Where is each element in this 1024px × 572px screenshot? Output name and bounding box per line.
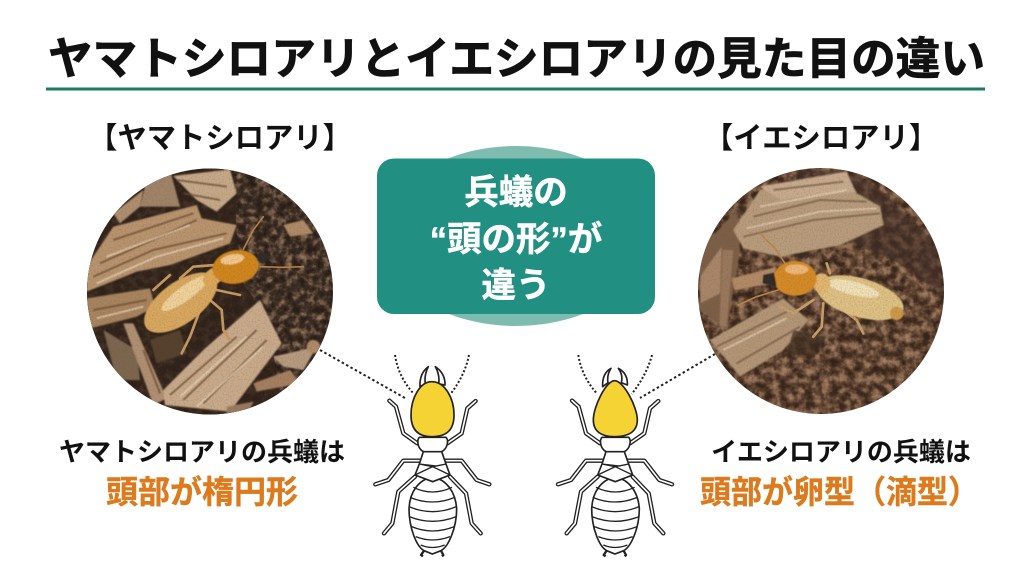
left caption: 頭部が楕円形 [106, 474, 298, 510]
left soldier illustration: elliptical head [375, 355, 489, 556]
right caption [700, 437, 979, 510]
right caption: 頭部が卵型（滴型） [700, 474, 979, 510]
right caption: イエシロアリの兵蟻は [711, 437, 971, 467]
left caption [59, 437, 345, 510]
photo: yamato termite on wood [87, 168, 333, 414]
right pointer dotted line [640, 354, 715, 398]
photo: formosan termite on soil [698, 168, 944, 414]
callout: soldier head shape differs: 違う [482, 267, 550, 305]
left pointer dotted line [320, 350, 405, 398]
right species heading: 【イエシロアリ】 [704, 122, 938, 155]
callout: soldier head shape differs [377, 146, 655, 326]
title: ヤマトシロアリとイエシロアリの見た目の違い [48, 35, 985, 84]
left caption: ヤマトシロアリの兵蟻は [59, 437, 345, 467]
right soldier illustration: egg-shaped head [558, 355, 672, 556]
left species heading: 【ヤマトシロアリ】 [88, 122, 352, 155]
callout: soldier head shape differs: 兵蟻の [464, 174, 568, 212]
callout: soldier head shape differs: “頭の形”が [430, 220, 602, 259]
title underline [46, 88, 985, 90]
